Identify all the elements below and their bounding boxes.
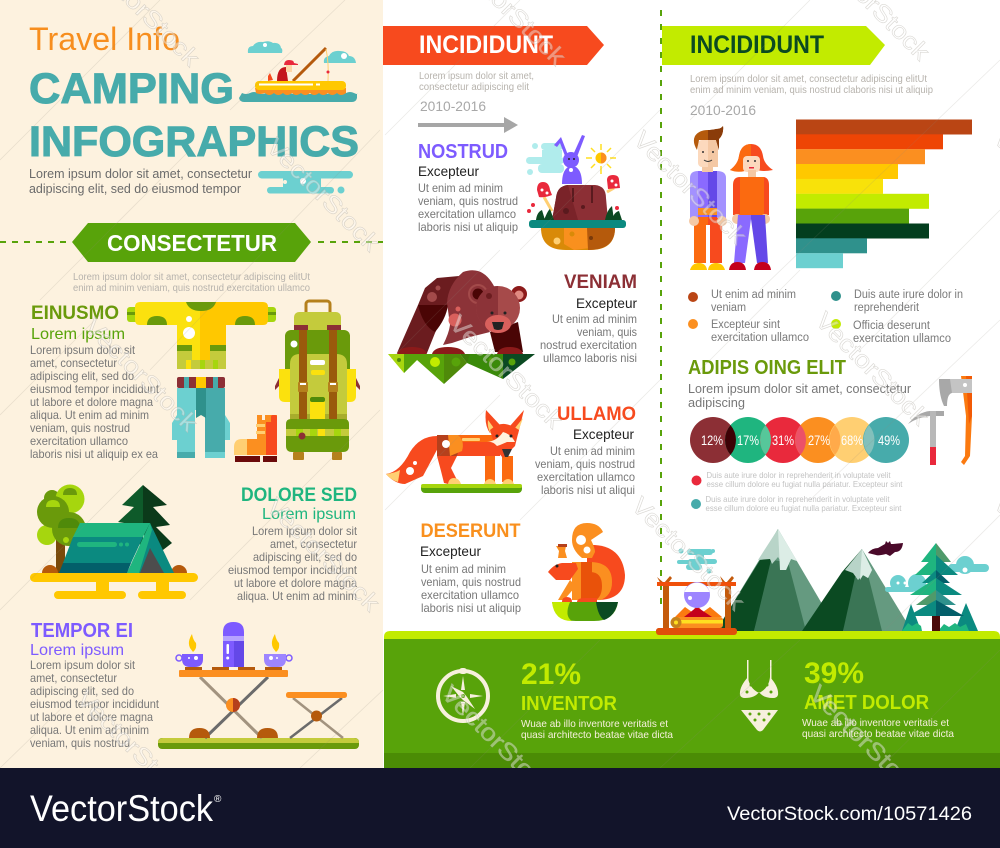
text block: Einusmo: veniam, quis nostrud xyxy=(30,421,130,435)
text block: Veniam: nostrud exercitation xyxy=(540,338,637,352)
text block: Veniam: ullamco laboris nisi xyxy=(543,351,637,365)
chart: percentage circles: 68% xyxy=(841,432,863,448)
stat: 39% amet dolor: AMET DOLOR xyxy=(804,692,930,714)
legend: bar chart: Officia deserunt xyxy=(853,320,931,332)
date range: 2010-2016 xyxy=(690,103,756,118)
watermark: diagonal hairlines and VectorStock stamps: VectorStock xyxy=(628,126,752,251)
banner caption: enim ad minim veniam, quis nostrud claboris nisi ut aliquip xyxy=(690,85,933,96)
text block: Ullamo xyxy=(535,404,636,497)
icon: tent scene xyxy=(30,484,198,599)
text block: Deserunt: Excepteur xyxy=(420,544,481,559)
subtitle: Travel Info: Travel Info xyxy=(29,21,180,57)
footer logo: VectorStock xyxy=(30,788,213,829)
icon: fishing boat xyxy=(239,41,357,102)
text block: Nostrud: veniam, quis nostrud xyxy=(418,194,518,208)
icon: campfire with pot xyxy=(656,548,737,635)
panel: right column xyxy=(656,26,989,635)
text block: adipis intro: adipiscing xyxy=(688,395,745,410)
text block: Nostrud: Excepteur xyxy=(418,164,479,179)
stat: 21% inventor: 21% xyxy=(521,658,581,691)
text block: Nostrud: exercitation ullamco xyxy=(418,207,516,221)
icon: sweater xyxy=(127,302,276,369)
stat: 39% amet dolor: quasi architecto beatae vitae dicta xyxy=(802,728,954,740)
title: Camping Infographics xyxy=(29,65,359,166)
chart: percentage circles: 17% xyxy=(737,432,759,448)
legend: bar chart: Duis aute irure dolor in xyxy=(854,289,963,301)
watermark: diagonal hairlines and VectorStock stamps: VectorStock xyxy=(261,133,385,258)
heading: Adipis Oing Elit: ADIPIS OING ELIT xyxy=(688,357,846,379)
text block: adipis intro xyxy=(688,381,912,410)
intro text: adipiscing elit, sed do eiusmod tempor xyxy=(29,181,242,196)
legend: circles xyxy=(691,470,903,513)
text block: Dolore Sed: amet, consectetur xyxy=(270,537,357,551)
text block: Tempor Ei: veniam, quis nostrud xyxy=(30,736,130,750)
legend: circles: esse cillum dolore eu fugiat nulla pariatur. Excepteur sint xyxy=(706,503,902,513)
panel: green stats band xyxy=(384,628,1000,768)
text block: Veniam: Ut enim ad minim xyxy=(552,312,637,326)
text block: Ullamo: Excepteur xyxy=(573,427,634,442)
icon: ice pick xyxy=(908,411,944,465)
legend: bar chart: exercitation ullamco xyxy=(711,332,809,344)
legend: bar chart: Excepteur sint xyxy=(711,319,781,331)
stat: 21% inventor xyxy=(521,658,673,741)
date range: 2010-2016 xyxy=(420,99,486,114)
text block: Tempor Ei: TEMPOR EI xyxy=(31,620,133,642)
icon: bikini xyxy=(740,660,778,732)
banner caption xyxy=(73,272,310,294)
text block: Einusmo: aliqua. Ut enim ad minim xyxy=(30,408,149,422)
banner caption xyxy=(419,71,534,93)
icon: compass xyxy=(438,668,488,721)
watermark: diagonal hairlines and VectorStock stamps: VectorStock xyxy=(436,680,560,805)
legend: circles: Duis aute irure dolor in reprehenderit in voluptate velit xyxy=(706,470,891,480)
text block: Dolore Sed: DOLORE SED xyxy=(241,485,357,506)
icon: trousers xyxy=(172,377,230,458)
text block: Nostrud: laboris nisi ut aliquip xyxy=(418,220,518,234)
text block: Deserunt: DESERUNT xyxy=(420,521,521,542)
icon: man figure xyxy=(689,126,727,270)
text block: Deserunt xyxy=(420,521,521,615)
arrow: timeline xyxy=(418,117,518,133)
icon: fox xyxy=(386,410,524,493)
icon: camping table and stool xyxy=(158,622,359,749)
banner caption: Lorem ipsum dolor sit amet, xyxy=(419,71,534,82)
text block: Einusmo: eiusmod tempor incididunt xyxy=(30,382,160,396)
banner: Consectetur: CONSECTETUR xyxy=(107,230,277,256)
banner: Incididunt red: INCIDIDUNT xyxy=(419,31,553,59)
banner: Incididunt lime: INCIDIDUNT xyxy=(690,31,824,59)
text block: Ullamo: laboris nisi ut aliqui xyxy=(541,483,635,497)
footer url: VectorStock.com/10571426 xyxy=(727,803,972,825)
text block: Einusmo: Lorem ipsum dolor sit xyxy=(30,343,136,357)
stat: 39% amet dolor: 39% xyxy=(804,657,864,690)
text block: Deserunt: veniam, quis nostrud xyxy=(421,575,521,589)
legend: bar chart xyxy=(688,289,963,345)
text block: Einusmo: amet, consectetur xyxy=(30,356,117,370)
legend: circles: esse cillum dolore eu fugiat nulla pariatur. Excepteur sint xyxy=(706,479,903,489)
stat: 21% inventor: quasi architecto beatae vitae dicta xyxy=(521,729,673,741)
banner caption: Lorem ipsum dolor sit amet, consectetur adipiscing elitUt xyxy=(690,74,927,85)
watermark: diagonal hairlines and VectorStock stamps: VectorStock xyxy=(626,492,750,617)
legend: bar chart: reprehenderit xyxy=(854,302,920,314)
text block: Nostrud xyxy=(418,141,518,234)
footer registered mark: ® xyxy=(214,794,222,805)
banner: Consectetur xyxy=(72,223,311,262)
legend: bar chart: exercitation ullamco xyxy=(853,333,951,345)
icon: woman figure xyxy=(729,144,773,270)
text block: Ullamo: veniam, quis nostrud xyxy=(535,457,635,471)
text block: Einusmo: ut labore et dolore magna xyxy=(30,395,153,409)
divider: dashed line xyxy=(0,241,383,243)
icon: rabbit on stump xyxy=(526,135,626,250)
text block: Tempor Ei: ut labore et dolore magna xyxy=(30,710,153,724)
text block: Einusmo: laboris nisi ut aliquip ex ea xyxy=(30,447,158,461)
text block: Ullamo: exercitation ullamco xyxy=(537,470,635,484)
text block: Dolore Sed xyxy=(228,485,358,603)
icon: pine tree and clouds xyxy=(885,543,989,632)
banner caption: Lorem ipsum dolor sit amet, consectetur adipiscing elitUt xyxy=(73,272,310,283)
chart: percentage circles: 31% xyxy=(772,432,794,448)
icon: decorative cloud stripes xyxy=(258,171,353,194)
text block: Einusmo xyxy=(30,303,160,461)
text block: adipis intro: Lorem ipsum dolor sit amet, consectetur xyxy=(688,381,912,396)
text block: Veniam xyxy=(540,272,637,365)
text block: Tempor Ei: eiusmod tempor incididunt xyxy=(30,697,160,711)
stat: 39% amet dolor: Wuae ab illo inventore veritatis et xyxy=(802,717,949,729)
text block: Dolore Sed: ut labore et dolore magna xyxy=(234,576,357,590)
text block: Tempor Ei: aliqua. Ut enim ad minim xyxy=(30,723,149,737)
text block: Veniam: veniam, quis xyxy=(577,325,637,339)
stat: 21% inventor: INVENTOR xyxy=(521,693,618,715)
banner caption: enim ad minim veniam, quis nostrud exercitation ullamco xyxy=(73,283,310,294)
text block: Dolore Sed: Lorem ipsum dolor sit xyxy=(252,524,358,538)
banner: Incididunt lime xyxy=(662,26,885,65)
chart: percentage circles xyxy=(690,417,909,463)
text block: Deserunt: laboris nisi ut aliquip xyxy=(421,601,521,615)
text block: Einusmo: Lorem ipsum xyxy=(31,326,125,343)
text block: Nostrud: Ut enim ad minim xyxy=(418,181,503,195)
banner caption: consectetur adipiscing elit xyxy=(419,82,529,93)
text block: Nostrud: NOSTRUD xyxy=(418,141,508,163)
watermark: diagonal hairlines and VectorStock stamps: VectorStock xyxy=(79,313,203,438)
text block: Einusmo: exercitation ullamco xyxy=(30,434,128,448)
panel: left cream column xyxy=(0,0,383,768)
text block: Dolore Sed: eiusmod tempor incididunt xyxy=(228,563,358,577)
chart: percentage circles: 49% xyxy=(878,432,900,448)
legend: bar chart: veniam xyxy=(711,302,746,314)
intro text xyxy=(29,166,253,196)
text block: Ullamo: Ut enim ad minim xyxy=(550,444,635,458)
legend: bar chart: Ut enim ad minim xyxy=(711,289,796,301)
banner: Incididunt red xyxy=(383,26,604,65)
legend: circles: Duis aute irure dolor in reprehenderit in voluptate velit xyxy=(706,494,890,504)
text block: Tempor Ei xyxy=(30,620,160,750)
stat: 21% inventor: Wuae ab illo inventore veritatis et xyxy=(521,718,668,730)
chart: percentage circles: 12% xyxy=(701,432,723,448)
intro text: Lorem ipsum dolor sit amet, consectetur xyxy=(29,166,253,181)
stat: 39% amet dolor xyxy=(802,657,954,740)
text block: Dolore Sed: aliqua. Ut enim ad minim xyxy=(237,589,357,603)
icon: backpack xyxy=(275,301,360,460)
text block: Veniam: VENIAM xyxy=(564,272,637,293)
text block: Deserunt: exercitation ullamco xyxy=(421,588,519,602)
watermark: diagonal hairlines and VectorStock stamps: VectorStock xyxy=(261,493,385,618)
text block: Dolore Sed: adipiscing elit, sed do xyxy=(253,550,357,564)
text block: Tempor Ei: Lorem ipsum xyxy=(30,642,124,659)
text block: Einusmo: EINUSMO xyxy=(31,303,119,324)
banner caption xyxy=(690,74,933,96)
panel: center column xyxy=(383,26,637,621)
watermark: diagonal hairlines and VectorStock stamps: VectorStock xyxy=(71,685,195,810)
icon: mountains xyxy=(716,529,912,631)
text block: Veniam: Excepteur xyxy=(576,296,637,311)
watermark: diagonal hairlines and VectorStock stamps: VectorStock xyxy=(444,310,568,435)
chart: horizontal bars xyxy=(796,120,972,268)
icon: bat xyxy=(868,541,903,556)
footer bar xyxy=(0,768,1000,848)
text block: Ullamo: ULLAMO xyxy=(557,404,636,425)
icon: boot xyxy=(234,415,277,462)
watermark: diagonal hairlines and VectorStock stamps: VectorStock xyxy=(804,680,928,805)
text block: Einusmo: adipiscing elit, sed do xyxy=(30,369,134,383)
title: Camping Infographics: INFOGRAPHICS xyxy=(29,118,359,166)
title: Camping Infographics: CAMPING xyxy=(29,65,234,113)
icon: axe xyxy=(939,376,972,465)
divider: vertical dashed line xyxy=(660,10,662,612)
text block: Deserunt: Ut enim ad minim xyxy=(421,562,506,576)
text block: Tempor Ei: adipiscing elit, sed do xyxy=(30,684,134,698)
text block: Tempor Ei: amet, consectetur xyxy=(30,671,117,685)
watermark: diagonal hairlines and VectorStock stamps: VectorStock xyxy=(810,307,934,432)
text block: Tempor Ei: Lorem ipsum dolor sit xyxy=(30,658,136,672)
icon: bear xyxy=(388,270,535,384)
chart: percentage circles: 27% xyxy=(808,432,830,448)
text block: Dolore Sed: Lorem ipsum xyxy=(262,506,356,523)
icon: squirrel xyxy=(548,523,625,621)
